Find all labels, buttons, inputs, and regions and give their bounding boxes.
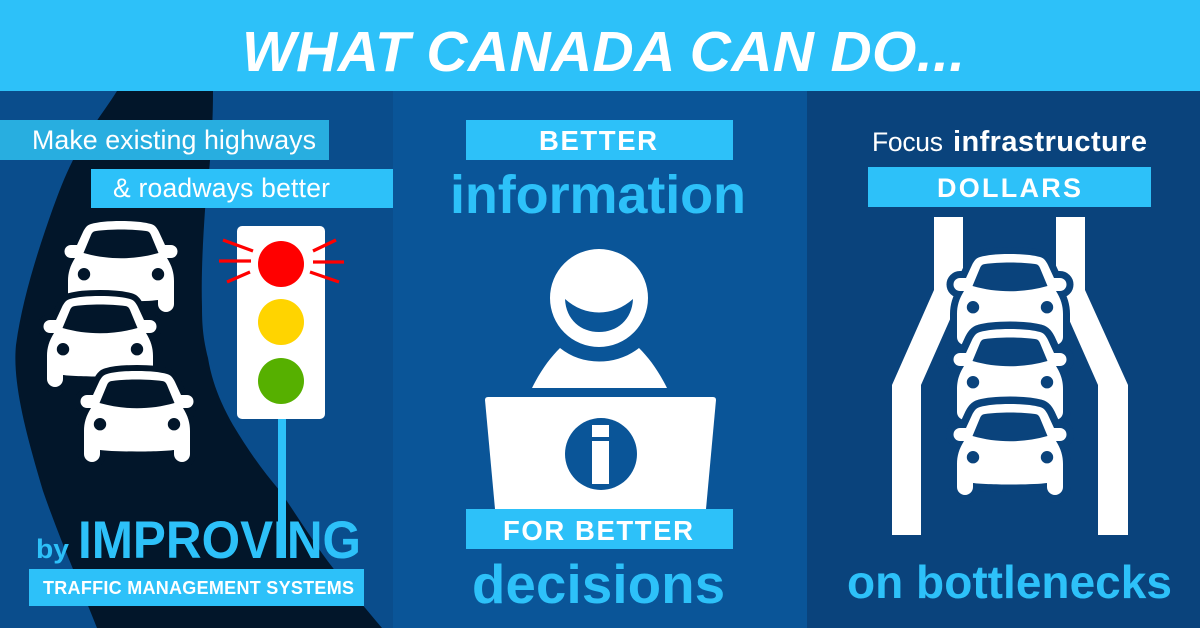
banner: for better: FOR BETTER bbox=[503, 515, 693, 546]
panel: make existing roads better bbox=[0, 91, 393, 628]
banner: make existing highways bbox=[0, 120, 329, 160]
title: WHAT CANADA CAN DO... bbox=[242, 20, 965, 84]
heading: information: information bbox=[450, 165, 746, 225]
banner: dollars: DOLLARS bbox=[937, 173, 1081, 203]
banner: better: BETTER bbox=[539, 125, 657, 156]
icon: person with laptop bbox=[485, 249, 716, 509]
banner: roadways better: & roadways better bbox=[113, 173, 330, 203]
banner: traffic management systems: TRAFFIC MANAGEMENT SYSTEMS bbox=[43, 578, 354, 598]
icon: three cars in bottleneck bbox=[954, 254, 1066, 495]
icon: road narrowing to a bottleneck bbox=[892, 217, 1128, 535]
text: focus infrastructure: Focus bbox=[872, 127, 943, 157]
heading: decisions: decisions bbox=[472, 554, 725, 615]
banner: better bbox=[466, 120, 733, 160]
panel: focus infrastructure dollars bbox=[807, 91, 1200, 628]
banner: make existing highways: Make existing highways bbox=[32, 125, 316, 155]
banner: for better bbox=[466, 509, 733, 549]
panel: better information bbox=[393, 91, 807, 628]
road bbox=[15, 91, 382, 628]
banner: dollars bbox=[868, 167, 1151, 207]
heading: by improving: IMPROVING bbox=[78, 511, 361, 570]
banner: roadways better bbox=[91, 169, 393, 208]
header banner bbox=[0, 0, 1200, 91]
icon: three cars in traffic bbox=[44, 221, 194, 462]
heading: on bottlenecks: on bottlenecks bbox=[847, 556, 1172, 608]
text: focus infrastructure: infrastructure bbox=[953, 126, 1147, 158]
heading: by improving: by bbox=[36, 534, 69, 564]
icon: traffic light bbox=[219, 226, 344, 558]
banner: traffic management systems bbox=[29, 569, 364, 606]
